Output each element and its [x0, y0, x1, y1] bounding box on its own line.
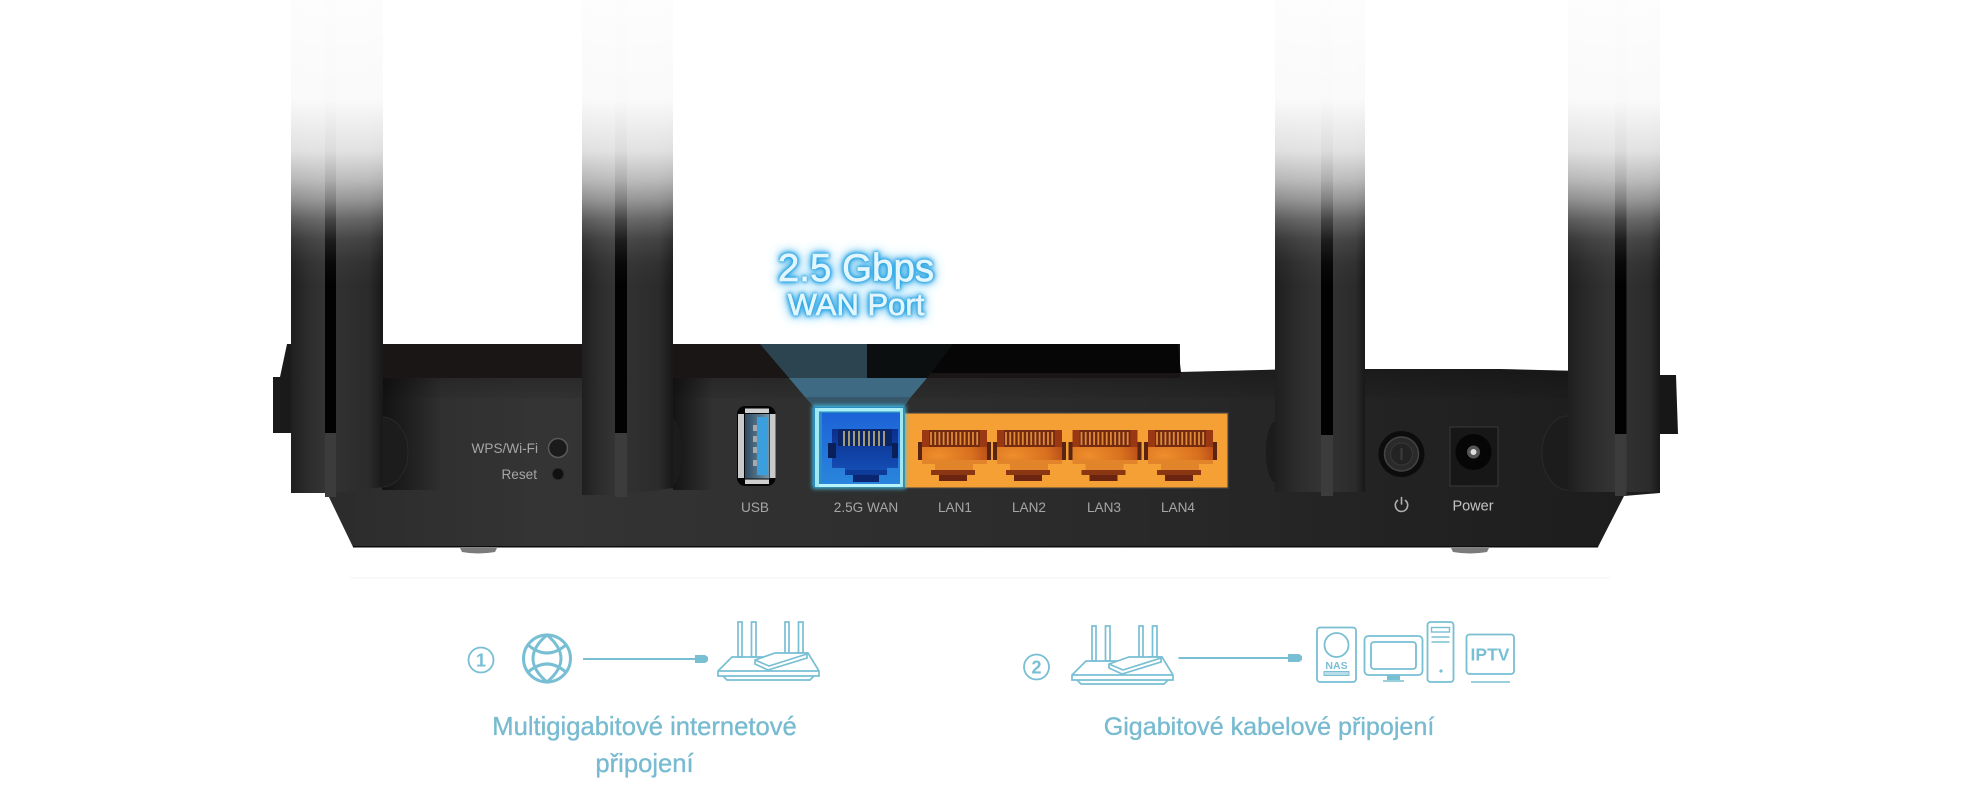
caption 1	[492, 713, 797, 778]
left foot	[460, 548, 497, 554]
cable	[583, 655, 708, 663]
caption 2: Gigabitové kabelové připojení	[1104, 713, 1434, 741]
power button	[1378, 431, 1424, 477]
faint floor line	[350, 577, 1610, 579]
antenna A	[291, 0, 383, 497]
antenna fade to white	[280, 0, 1670, 285]
port labels: LAN1	[938, 500, 972, 515]
left clip	[273, 344, 292, 433]
icon: globe	[524, 635, 570, 682]
icon: router	[718, 622, 819, 680]
port labels: LAN3	[1087, 500, 1121, 515]
power jack	[1450, 427, 1498, 486]
RJ45 socket	[828, 429, 898, 482]
diagram 1: WAN connection	[468, 622, 819, 682]
back band	[292, 344, 1180, 380]
antenna base B	[664, 420, 682, 484]
heading: 2.5 Gbps: 2.5 Gbps	[778, 247, 934, 290]
light cone from WAN port	[760, 344, 953, 407]
shadow right of antenna A	[382, 378, 442, 490]
port labels: LAN4	[1161, 500, 1195, 515]
antenna C	[1275, 0, 1365, 496]
LAN2 port	[993, 430, 1066, 481]
button: Reset: Reset	[501, 467, 537, 482]
button: Reset	[501, 467, 564, 482]
port labels	[834, 500, 1195, 515]
port labels: LAN2	[1012, 500, 1046, 515]
icon: NAS	[1317, 628, 1356, 682]
right clip	[1656, 375, 1678, 434]
top slab	[867, 344, 1181, 373]
caption 1: Multigigabitové internetové	[492, 713, 797, 741]
icon: monitor	[1364, 636, 1422, 681]
power label: Power	[1452, 498, 1494, 514]
step number 1	[468, 648, 494, 672]
LAN3 port	[1068, 430, 1142, 481]
WAN port	[814, 407, 904, 487]
step number 2: 2	[1031, 658, 1042, 678]
cable	[1178, 654, 1302, 662]
icon: PC tower	[1428, 622, 1454, 682]
LAN1 port	[918, 430, 991, 481]
step number 2	[1024, 654, 1049, 680]
upper strip of the body	[292, 369, 1660, 398]
right foot	[1451, 548, 1489, 554]
antenna base A	[356, 417, 408, 487]
antenna base C	[1266, 422, 1284, 482]
LAN4 port	[1144, 430, 1217, 481]
icon: router	[1072, 626, 1173, 684]
antenna base D	[1542, 416, 1594, 490]
button: WPS/Wi-Fi	[472, 438, 568, 458]
router body	[292, 369, 1660, 547]
button: WPS/Wi-Fi: WPS/Wi-Fi	[472, 441, 538, 456]
shadow right of antenna B	[673, 378, 713, 490]
icon: IPTV: IPTV	[1471, 644, 1510, 664]
LAN ports panel	[904, 412, 1229, 489]
USB port	[737, 406, 776, 515]
icon: NAS: NAS	[1325, 660, 1348, 672]
diagram 2: LAN connection	[1024, 622, 1514, 684]
port labels: 2.5G WAN	[834, 500, 898, 515]
subheading: WAN Port: WAN Port	[788, 287, 924, 322]
antenna D	[1568, 0, 1660, 496]
antenna B	[582, 0, 673, 497]
router chassis	[273, 344, 1678, 554]
step number 1: 1	[476, 650, 486, 670]
caption 1: připojení	[595, 750, 694, 778]
power icon	[1395, 498, 1408, 511]
USB port: USB	[741, 500, 769, 515]
icon: IPTV	[1466, 634, 1514, 682]
